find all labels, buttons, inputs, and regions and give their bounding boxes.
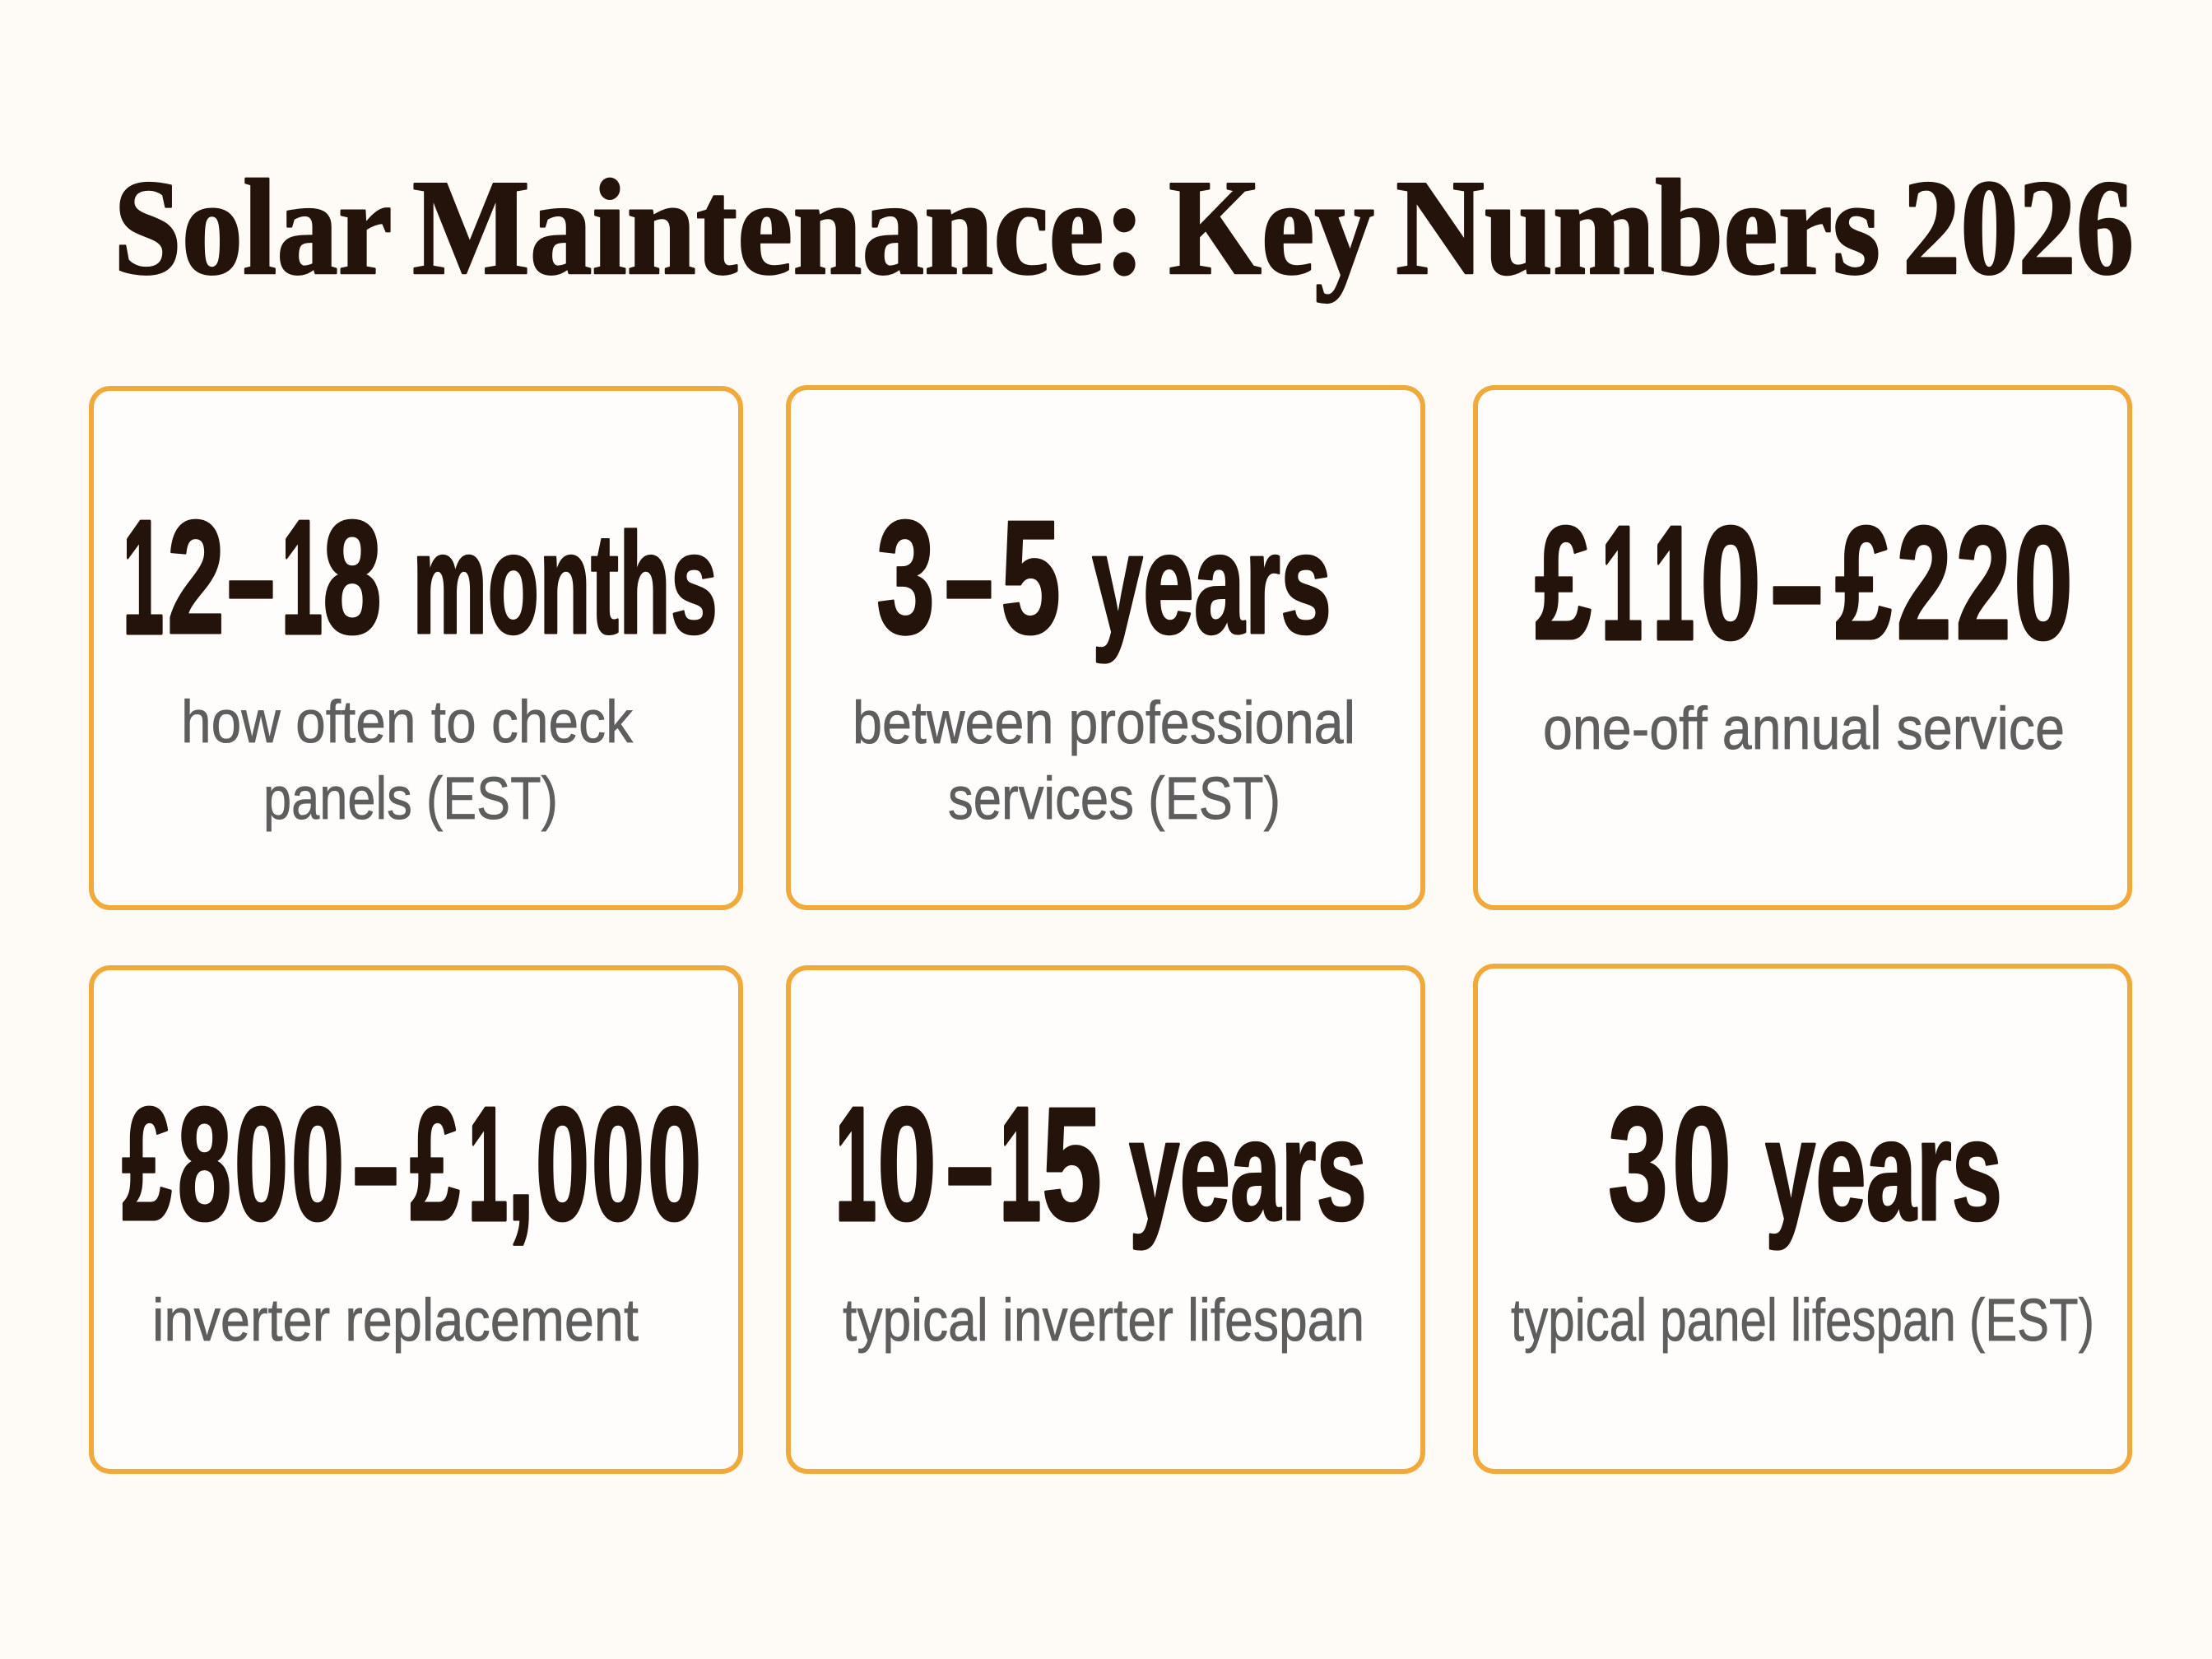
title: Key [1169,151,1374,303]
stat: 10–15 years [835,1074,1367,1254]
stat: 10–15 years: 1 [1000,1074,1041,1254]
description: between professional services: services (EST) [948,765,1280,832]
stat: £110–£220: 0 [2014,493,2073,673]
stat: 3–5 years [876,487,1331,667]
stat: £110–£220: – [1771,493,1823,673]
stat: 10–15 years: 5 [1042,1074,1102,1254]
stat: 10–15 years: 0 [877,1074,936,1254]
stat: 30 years [1608,1074,2002,1254]
stat: 12–18 months [123,487,718,667]
stat: 30 years: 3 [1608,1074,1668,1254]
stat: 3–5 years: – [945,487,993,667]
title [114,151,2134,303]
description: how often to check panels [181,689,633,832]
stat: 3–5 years: years [1092,503,1331,663]
stat: 30 years: 0 [1672,1074,1731,1254]
description: how often to check panels: how often to check [181,689,633,755]
description: how often to check panels: panels (EST) [263,765,558,832]
stat: £110–£220: £ [1835,493,1892,673]
title: Maintenance: [412,151,1146,303]
description: inverter replacement: inverter replacement [152,1287,639,1354]
stat: £800–£1,000: 0 [535,1074,589,1254]
description: typical inverter lifespan: typical inverter lifespan [843,1287,1364,1354]
panel: inverter replacement cost [91,968,741,1471]
stat: £110–£220: 0 [1700,493,1761,673]
stat: £800–£1,000: £ [122,1074,172,1254]
stat: £800–£1,000: 8 [178,1074,232,1254]
stat: £110–£220: 1 [1653,493,1694,673]
stat: £110–£220: 2 [1896,493,1952,673]
panel: inverter lifespan [788,968,1423,1471]
description: between professional services [853,690,1355,832]
stat: 12–18 months: months [412,503,718,663]
stat: £110–£220: £ [1535,493,1592,673]
description: between professional services: between professional [853,690,1355,756]
stat: 10–15 years: 1 [835,1074,876,1254]
stat: 12–18 months: 1 [123,487,164,667]
stat: £800–£1,000: 0 [234,1074,288,1254]
panel: professional service interval [788,388,1423,908]
stat: 12–18 months: – [227,487,275,667]
stat: £800–£1,000: 1 [468,1074,508,1254]
panel: annual service cost [1475,388,2130,908]
stat: 10–15 years: – [946,1074,993,1254]
title: Numbers [1396,151,1880,303]
stat: 3–5 years: 5 [1001,487,1061,667]
stat: £800–£1,000: £ [410,1074,460,1254]
title: 2026 [1903,151,2134,303]
stat: £800–£1,000: 0 [647,1074,701,1254]
stat: £110–£220: 2 [1955,493,2011,673]
stat: £110–£220: 1 [1601,493,1643,673]
description: one-off annual service: one-off annual service [1543,695,2065,762]
title: Solar [114,151,390,303]
stat: £800–£1,000: , [507,1074,535,1254]
stat: £800–£1,000: 0 [591,1074,645,1254]
stat: 12–18 months: 1 [281,487,323,667]
panel: panel lifespan [1475,966,2130,1471]
panel: check frequency [91,388,741,908]
stat: 30 years: years [1765,1090,2002,1250]
stat: £800–£1,000: – [353,1074,398,1254]
stat: 12–18 months: 2 [167,487,225,667]
stat: £800–£1,000: 0 [291,1074,344,1254]
stat: 3–5 years: 3 [876,487,935,667]
stat: 12–18 months: 8 [323,487,382,667]
stat: 10–15 years: years [1129,1090,1367,1250]
